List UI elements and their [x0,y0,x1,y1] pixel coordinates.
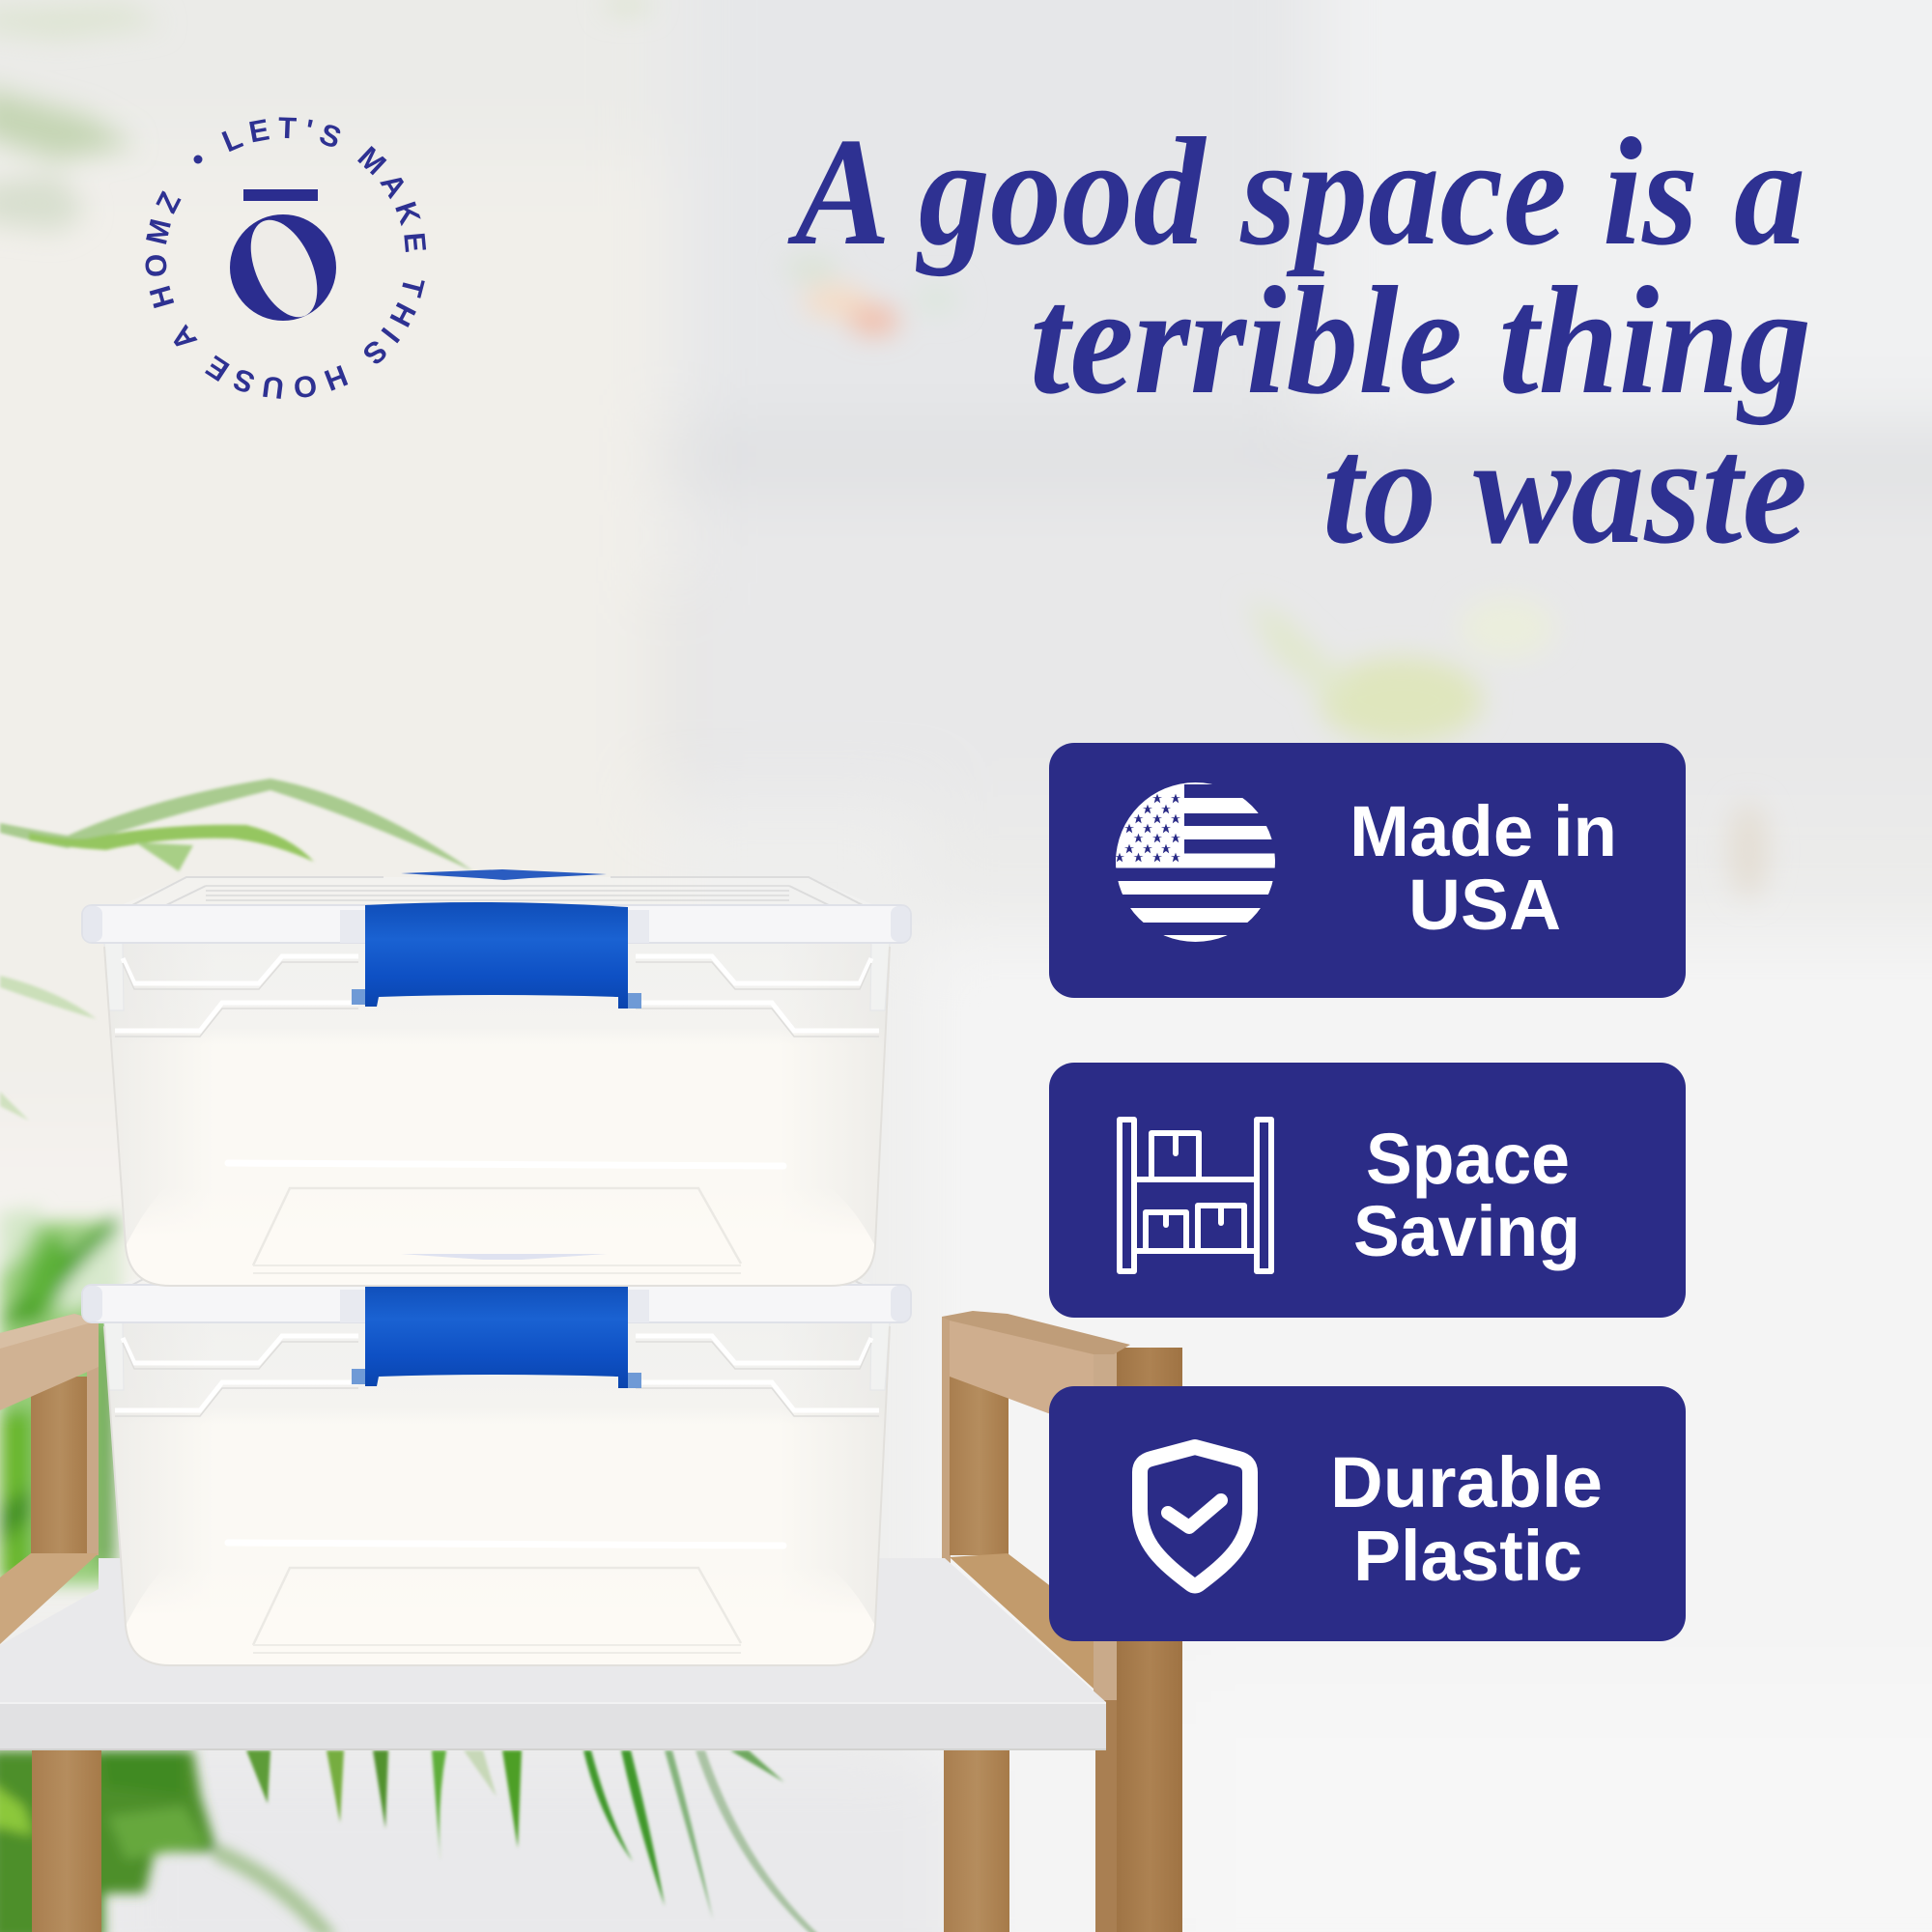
headline: A good space is a [787,105,1805,277]
circular slogan: LET'S MAKE THIS HOUSE A HOMZ [145,117,427,399]
stacked storage boxes [82,869,911,1665]
label: durable plastic: Plastic [1353,1516,1582,1596]
bottom box [82,1257,911,1665]
right shelf legs [942,1311,1182,1932]
label: durable plastic: Durable [1330,1442,1603,1522]
label: space saving: Space [1366,1119,1570,1199]
hanging palm leaves [246,1750,821,1932]
left shelf legs [0,1314,101,1932]
label: made in USA [1350,791,1617,945]
diagonal braces [0,1553,1094,1689]
top box [82,869,911,1286]
left blurred plant [0,1208,121,1584]
headline [787,105,1811,576]
headline: to waste [1322,404,1807,576]
logo [145,117,427,399]
label: durable plastic [1330,1442,1603,1596]
panel: made in USA [1049,743,1686,998]
panel: space saving [1049,1063,1686,1318]
panel: durable plastic [1049,1386,1686,1641]
icon: shield with check [1140,1447,1250,1586]
lower left blurred plant [0,1750,338,1932]
background plant leaves [0,779,473,1121]
label: made in USA: USA [1408,865,1561,945]
blurred colour spots [0,0,1768,898]
logo mark o with macron [230,189,336,327]
white shelf board [0,1558,1106,1750]
icon: shelving with boxes [1120,1120,1271,1271]
label: space saving [1353,1119,1580,1271]
icon: American flag circle [1111,781,1281,943]
label: space saving: Saving [1353,1191,1580,1271]
label: made in USA: Made in [1350,791,1617,871]
headline: terrible thing [1030,254,1811,426]
wooden shelf unit [0,1311,1182,1932]
